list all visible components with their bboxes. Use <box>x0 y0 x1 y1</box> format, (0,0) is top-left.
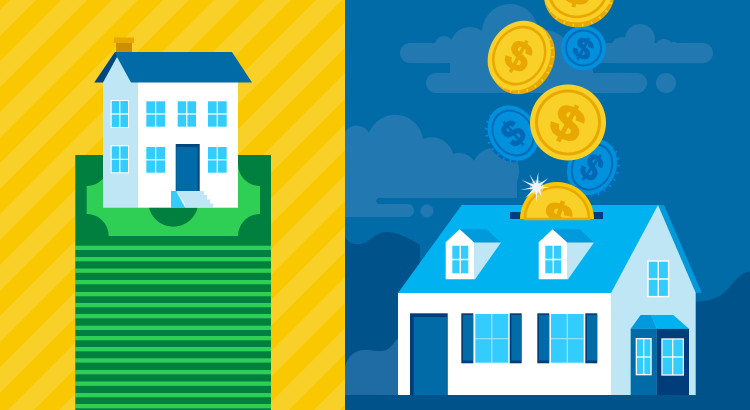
sparkle <box>520 172 550 202</box>
front door <box>410 313 448 395</box>
dormer right <box>539 229 594 279</box>
hill: lighter left <box>345 336 400 395</box>
gold coin tilted <box>475 10 567 106</box>
coin entering slot: $ <box>535 190 579 248</box>
roof <box>398 205 658 293</box>
gold coin tilted: $ <box>497 30 540 82</box>
money stack <box>75 155 271 410</box>
gold coin large <box>530 84 606 160</box>
panel: blue sky background <box>345 0 750 410</box>
blue coin left <box>475 96 549 172</box>
coin entering slot <box>520 182 594 220</box>
chimney <box>116 43 132 53</box>
ground <box>345 395 750 410</box>
side gable wall <box>611 205 696 395</box>
panel: yellow striped background <box>0 0 345 410</box>
front wall <box>138 82 238 208</box>
blue coin small: $ <box>567 30 599 67</box>
small house on money <box>94 38 252 208</box>
door <box>176 144 200 192</box>
side wall <box>103 57 138 208</box>
bill face <box>87 164 260 236</box>
cloud cutouts <box>376 63 640 204</box>
gable window <box>647 260 669 297</box>
clouds <box>345 4 713 218</box>
blue coin right <box>557 130 630 205</box>
stack stripes <box>75 246 271 408</box>
front wall <box>398 293 611 395</box>
window with shutters right <box>537 313 597 363</box>
hill: dark left <box>345 232 420 395</box>
side gable edge <box>658 205 702 293</box>
window with shutters left <box>461 313 522 363</box>
front windows <box>146 101 227 173</box>
bill base <box>75 155 271 410</box>
gold coin large: $ <box>542 92 594 154</box>
hill: dark right <box>690 271 750 395</box>
blue coin small <box>561 26 606 70</box>
blue coin right: $ <box>572 145 611 190</box>
dormer left <box>446 229 501 279</box>
big house <box>398 172 702 395</box>
steps <box>171 191 213 208</box>
roof <box>94 52 252 82</box>
coin slot <box>510 212 603 219</box>
blue coin left: $ <box>494 111 534 156</box>
gold coin top <box>535 0 622 36</box>
side windows <box>111 100 129 173</box>
bill center circle <box>148 177 198 227</box>
porch <box>631 315 689 395</box>
